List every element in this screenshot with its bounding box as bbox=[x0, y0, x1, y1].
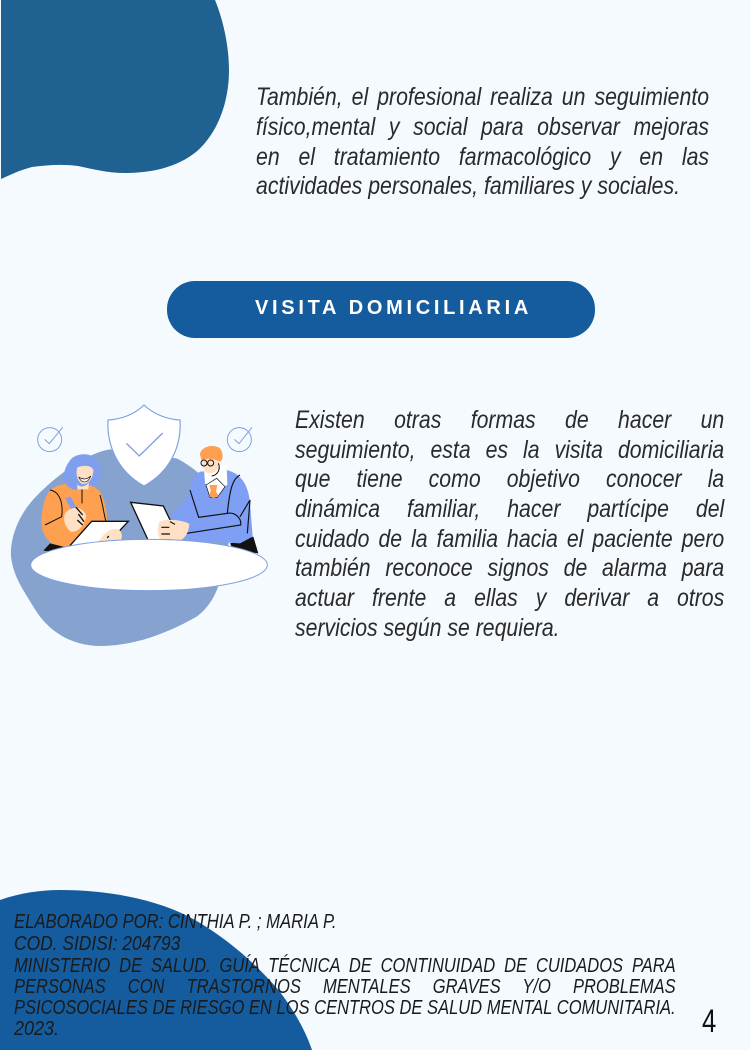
paragraph: visita domiciliaria: actuar frente a ellas y derivar a otros bbox=[295, 584, 724, 612]
footer credits: PERSONAS CON TRASTORNOS MENTALES GRAVES Y/O PROBLEMAS bbox=[14, 976, 676, 998]
paragraph: seguimiento: físico,mental y social para observar mejoras bbox=[256, 113, 709, 141]
icon: right check circle bbox=[227, 427, 252, 452]
page number: 4 bbox=[702, 1003, 716, 1039]
background blob bbox=[11, 449, 233, 646]
man's tablet bbox=[131, 502, 189, 544]
footer credits bbox=[14, 911, 676, 1040]
heading pill: visita domiciliaria bbox=[167, 281, 595, 338]
footer credits: MINISTERIO DE SALUD. GUÍA TÉCNICA DE CONTINUIDAD DE CUIDADOS PARA bbox=[14, 955, 676, 977]
paragraph: seguimiento: También, el profesional realiza un seguimiento bbox=[256, 83, 709, 111]
icon: left check circle bbox=[38, 427, 63, 452]
paragraph: visita domiciliaria: también reconoce signos de alarma para bbox=[295, 554, 724, 582]
table bbox=[31, 539, 267, 591]
paragraph: visita domiciliaria: seguimiento, esta es la visita domiciliaria bbox=[295, 436, 724, 464]
paragraph: visita domiciliaria: cuidado de la familia hacia el paciente pero bbox=[295, 525, 724, 553]
paragraph: seguimiento bbox=[256, 83, 709, 200]
paragraph: visita domiciliaria: que tiene como objetivo conocer la bbox=[295, 465, 724, 493]
paragraph: visita domiciliaria: Existen otras formas de hacer un bbox=[295, 406, 724, 434]
paragraph: visita domiciliaria bbox=[295, 406, 725, 642]
footer credits: COD. SIDISI: 204793 bbox=[14, 933, 180, 955]
footer credits: PSICOSOCIALES DE RIESGO EN LOS CENTROS DE SALUD MENTAL COMUNITARIA. bbox=[14, 997, 676, 1019]
heading pill: visita domiciliaria: VISITA DOMICILIARIA bbox=[255, 297, 532, 319]
woman with blue hair bbox=[41, 454, 107, 553]
paragraph: seguimiento: en el tratamiento farmacológico y en las bbox=[256, 143, 709, 171]
illustration: two people at a table bbox=[10, 404, 268, 646]
man with glasses bbox=[170, 446, 258, 553]
footer credits: ELABORADO POR: CINTHIA P. ; MARIA P. bbox=[14, 911, 337, 933]
paragraph: seguimiento: actividades personales, familiares y sociales. bbox=[256, 172, 680, 200]
woman's clipboard bbox=[64, 521, 128, 553]
top-left blue blob bbox=[1, 0, 229, 179]
icon: shield bbox=[108, 405, 180, 486]
bottom-left blue blob bbox=[0, 890, 312, 1050]
footer credits: 2023. bbox=[14, 1018, 59, 1040]
paragraph: visita domiciliaria: servicios según se requiera. bbox=[295, 614, 560, 642]
paragraph: visita domiciliaria: dinámica familiar, hacer partícipe del bbox=[295, 495, 724, 523]
